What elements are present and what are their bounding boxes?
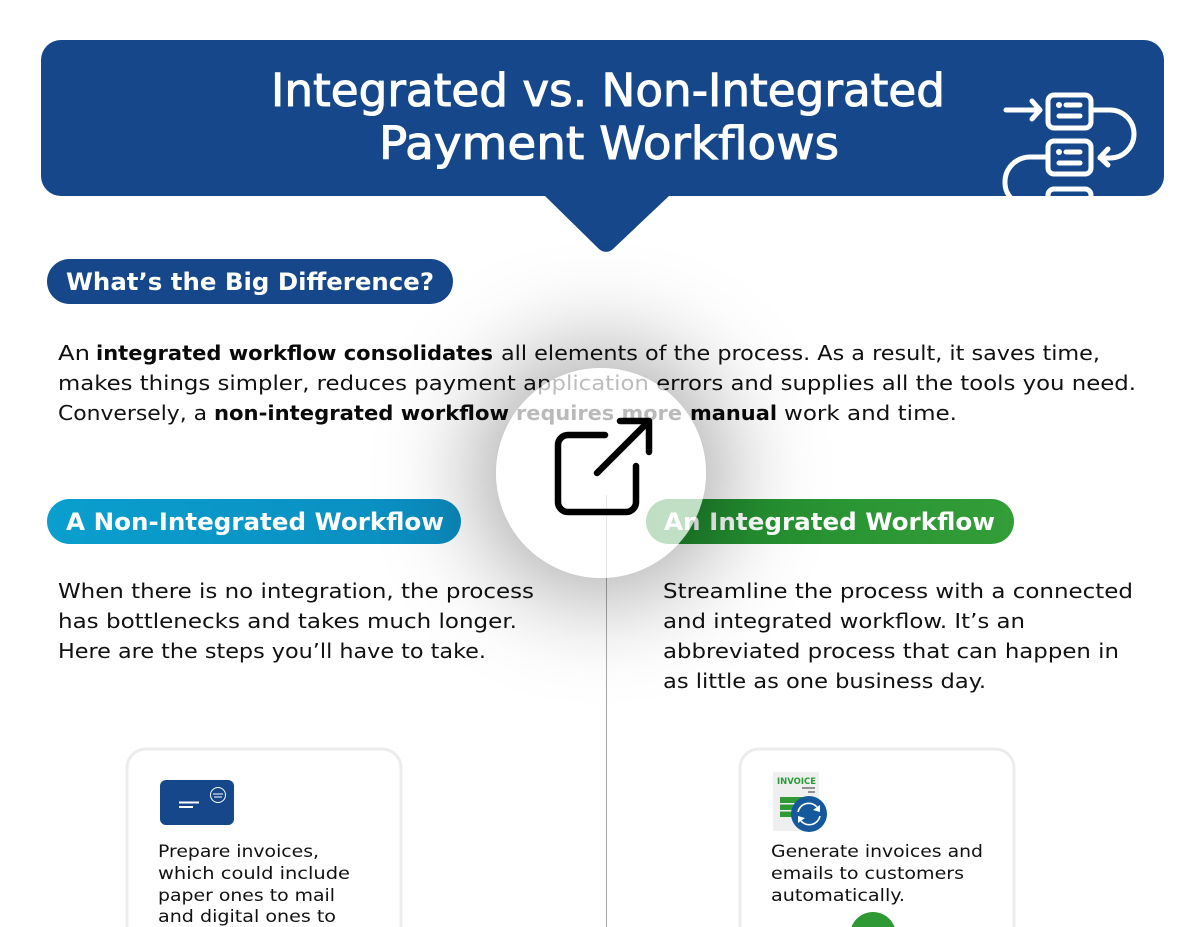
overlay: open-link button (476, 348, 726, 598)
intro paragraph: manual (690, 401, 777, 425)
title (271, 64, 945, 170)
icon: invoice with refresh badge (773, 772, 827, 832)
section heading pill: integrated: An Integrated Workflow (664, 508, 995, 536)
icon: workflow (1002, 92, 1136, 196)
column divider (606, 495, 608, 927)
section heading pill: integrated (646, 499, 1014, 544)
header banner (41, 40, 1164, 252)
intro paragraph: non-integrated workflow (214, 401, 509, 425)
integrated description: abbreviated process that can happen in (663, 639, 1119, 663)
panel: generate invoices card (740, 749, 1014, 927)
intro paragraph: integrated workflow consolidates (96, 341, 493, 365)
non-integrated description: has bottlenecks and takes much longer. (58, 609, 517, 633)
icon: invoice with refresh badge: INVOICE (777, 777, 816, 787)
icon: external link (558, 421, 649, 512)
non-integrated description: Here are the steps you’ll have to take. (58, 639, 486, 663)
intro paragraph: requires more (516, 401, 682, 425)
section heading pill: non-integrated: A Non-Integrated Workflow (66, 508, 444, 536)
integrated description (663, 579, 1133, 693)
non-integrated description: When there is no integration, the process (58, 579, 534, 603)
section heading pill: big difference (47, 259, 453, 304)
integrated description: Streamline the process with a connected (663, 579, 1133, 603)
shadow halo (476, 348, 726, 598)
card text: Prepare invoices, (158, 842, 319, 861)
card text: automatically. (771, 886, 905, 905)
step marker (850, 912, 896, 927)
intro paragraph: all elements of the process. As a result, it saves time, (501, 341, 1100, 365)
section heading pill: big difference: What’s the Big Difference? (66, 268, 434, 296)
intro paragraph (58, 341, 1136, 425)
icon: envelope (160, 780, 234, 825)
intro paragraph: An (58, 341, 90, 365)
intro paragraph: makes things simpler, reduces payment application errors and supplies all the tools you need. (58, 371, 1136, 395)
intro paragraph: Conversely, a (58, 401, 207, 425)
panel: prepare invoices card (127, 749, 401, 927)
card text: and digital ones to (158, 907, 336, 926)
integrated description: and integrated workflow. It’s an (663, 609, 1025, 633)
title: Payment Workflows (379, 117, 839, 170)
integrated description: as little as one business day. (663, 669, 986, 693)
title: Integrated vs. Non-Integrated (271, 64, 945, 117)
card text (771, 842, 983, 905)
intro paragraph: work and time. (784, 401, 957, 425)
card text (158, 842, 350, 926)
non-integrated description (58, 579, 534, 663)
card text: paper ones to mail (158, 886, 335, 905)
button circle (496, 368, 706, 578)
card text: Generate invoices and (771, 842, 983, 861)
card text: emails to customers (771, 864, 964, 883)
card text: which could include (158, 864, 350, 883)
section heading pill: non-integrated (47, 499, 461, 544)
